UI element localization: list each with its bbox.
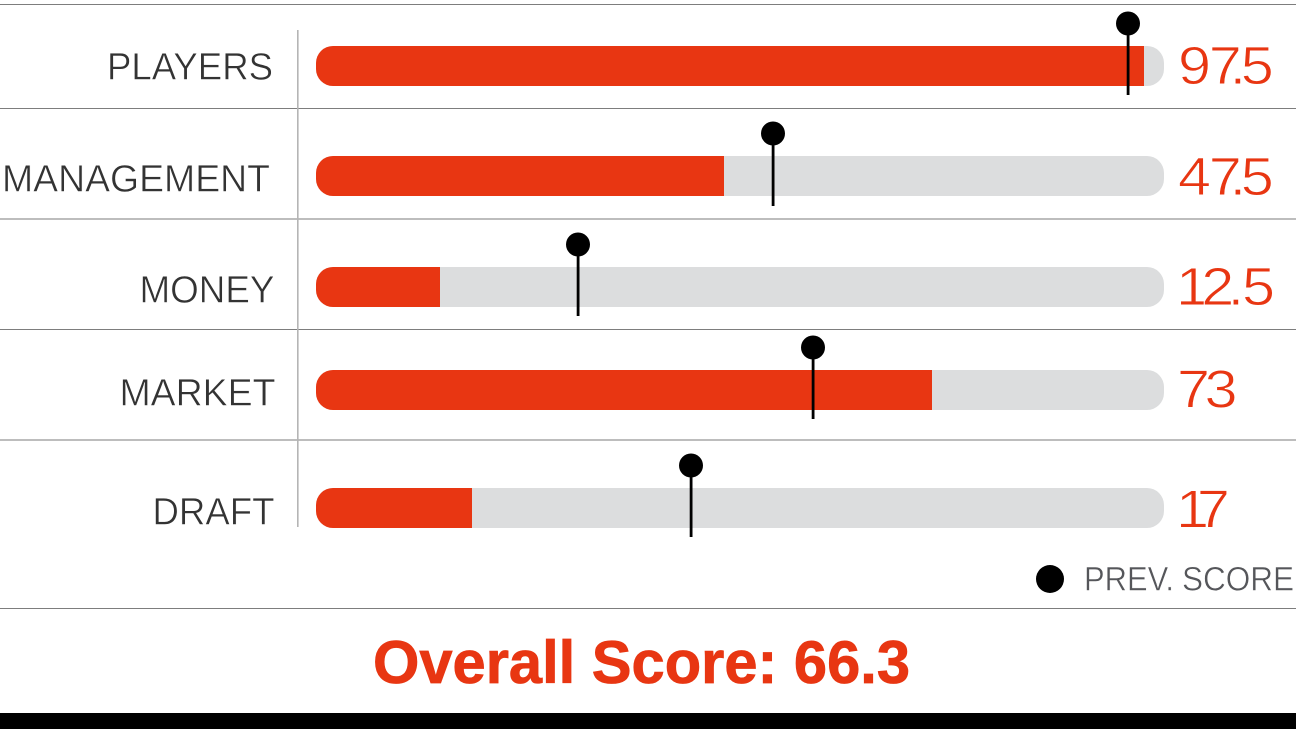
- row: draft: [152, 454, 1230, 540]
- bottom black band: [0, 713, 1296, 729]
- bar: money: [316, 267, 1164, 307]
- value: money: 12.5: [1176, 257, 1275, 317]
- bar: management: [316, 156, 1164, 196]
- overall score: Overall Score: 66.3: [373, 629, 910, 696]
- previous score marker: management: [761, 122, 785, 206]
- bar: market: [316, 370, 1164, 410]
- previous score marker: draft: [679, 454, 703, 537]
- label: draft: DRAFT: [152, 492, 274, 534]
- value: draft: 17: [1176, 480, 1230, 540]
- value: management: 47.5: [1178, 147, 1274, 207]
- label: market: MARKET: [120, 372, 276, 414]
- label: management: MANAGEMENT: [2, 158, 270, 200]
- bar: draft: [316, 488, 1164, 528]
- previous score marker: market: [801, 336, 825, 419]
- row: market: [120, 336, 1238, 420]
- row: players: [107, 12, 1274, 96]
- legend: previous score: PREV.: [1084, 560, 1174, 598]
- label: players: PLAYERS: [107, 46, 273, 88]
- row: money: [140, 232, 1275, 317]
- previous score marker: players: [1116, 12, 1140, 95]
- label: money: MONEY: [140, 270, 274, 312]
- bar: players: [316, 46, 1164, 86]
- row: management: [2, 122, 1274, 207]
- previous score marker: money: [566, 232, 590, 316]
- value: market: 73: [1177, 360, 1238, 420]
- legend: previous score: [1036, 560, 1294, 598]
- value: players: 97.5: [1178, 36, 1274, 96]
